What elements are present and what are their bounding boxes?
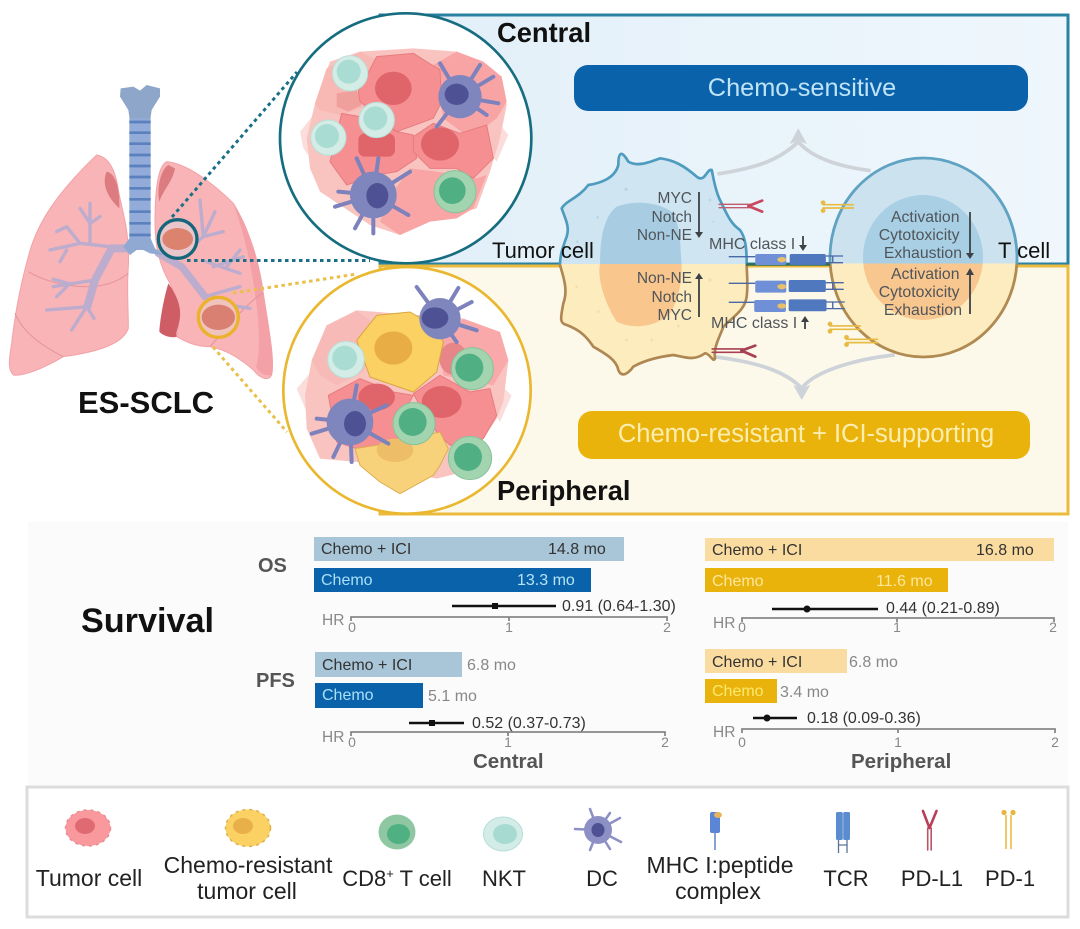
text: Chemo-resistant tumor cell: Chemo-resistant xyxy=(164,852,333,878)
chart: peripheral PFS: Chemo xyxy=(712,683,764,700)
text: MHC I:peptide complex: complex xyxy=(675,878,761,904)
text: DC: DC xyxy=(586,866,618,891)
T cell arrows xyxy=(966,212,974,314)
text: CD8+ T cell: + xyxy=(386,866,394,881)
peripheral zoom circle xyxy=(283,267,531,514)
icon: TCR xyxy=(836,812,850,853)
MHC class I labels: MHC class I xyxy=(709,236,795,253)
chart: peripheral OS: Chemo xyxy=(712,573,764,590)
panel: peripheral (chemo-resistant) xyxy=(380,266,1068,514)
CD8 T cell xyxy=(434,171,476,213)
icon: chemo-resistant tumor cell xyxy=(226,810,270,846)
panel: central (chemo-sensitive) xyxy=(380,15,1068,264)
heading: ES-SCLC: ES-SCLC xyxy=(78,385,214,420)
lung shading xyxy=(15,165,273,375)
chart: peripheral PFS: HR xyxy=(713,724,735,741)
banner: chemo-sensitive: Chemo-sensitive xyxy=(708,74,896,102)
tumor cell labels xyxy=(637,190,692,324)
tumor cell arrows xyxy=(695,192,703,317)
text: PD-L1: PD-L1 xyxy=(901,866,963,891)
chart: central OS: Chemo xyxy=(321,572,373,589)
chart: central PFS: Chemo + ICI xyxy=(322,657,412,674)
text: NKT: NKT xyxy=(482,866,526,891)
legend box xyxy=(27,787,1068,917)
arrow: down to chemo-resistant xyxy=(714,355,895,400)
trachea xyxy=(120,85,163,255)
heading: Central: Central xyxy=(497,17,591,48)
label: PFS: PFS xyxy=(256,670,295,692)
tumor cell labels: MYC xyxy=(658,190,692,207)
label: Central: Central xyxy=(473,750,544,773)
T cell labels: Cytotoxicity xyxy=(879,227,960,244)
T cell labels: Activation xyxy=(891,266,960,283)
chart: central PFS: 2 xyxy=(661,734,669,750)
chart: peripheral OS: HR xyxy=(713,615,735,632)
chart: central OS xyxy=(314,537,676,635)
T cell labels: Cytotoxicity xyxy=(879,284,960,301)
tumor cell xyxy=(560,154,747,374)
tumor cells xyxy=(330,53,493,185)
chart: central OS: 14.8 mo xyxy=(548,541,606,558)
chart: central PFS: Chemo xyxy=(322,687,374,704)
dotted connectors xyxy=(172,72,370,432)
chart: peripheral PFS: Chemo + ICI xyxy=(712,654,802,671)
banner: chemo-resistant + ICI-supporting: Chemo-resistant + ICI-supporting xyxy=(618,420,994,448)
label: Peripheral: Peripheral xyxy=(851,750,951,773)
chemo-resistant tumor cells xyxy=(355,312,448,494)
T cell labels: Exhaustion xyxy=(884,302,962,319)
chart: peripheral OS: 0.44 (0.21-0.89) xyxy=(886,600,1000,617)
icon: DC xyxy=(575,809,621,850)
tumor cells xyxy=(328,375,497,449)
chart: peripheral OS: Chemo + ICI xyxy=(712,542,802,559)
chart: central PFS: 0 xyxy=(348,734,356,750)
chart: central PFS: 1 xyxy=(504,734,512,750)
organelle dots xyxy=(575,188,714,341)
curved arrows and receptors xyxy=(714,128,895,400)
chart: peripheral OS: 16.8 mo xyxy=(976,542,1034,559)
text: Tumor cell: Tumor cell xyxy=(36,865,142,891)
peripheral tumor marker xyxy=(198,297,238,337)
chart: central PFS: 0.52 (0.37-0.73) xyxy=(472,715,586,732)
chart: central OS: Chemo + ICI xyxy=(321,541,411,558)
central zoom circle xyxy=(280,13,531,263)
chart: peripheral PFS: 0.18 (0.09-0.36) xyxy=(807,710,921,727)
T cell xyxy=(830,158,1017,357)
tumor cell labels: Notch xyxy=(652,289,692,306)
T cell labels xyxy=(879,209,962,319)
text: PD-1: PD-1 xyxy=(985,866,1035,891)
label: OS: OS xyxy=(258,555,287,577)
T cell labels: Exhaustion xyxy=(884,245,962,262)
tumor cell labels: Non-NE xyxy=(637,227,692,244)
icon: PD-1 xyxy=(1001,810,1016,849)
PD-1 receptors xyxy=(821,200,878,347)
pale tumor cells xyxy=(297,310,512,479)
dendritic cells xyxy=(312,287,477,462)
MHC class I labels: MHC class I xyxy=(711,315,797,332)
chart: central OS: 13.3 mo xyxy=(517,572,575,589)
chart: central OS: HR xyxy=(322,612,344,629)
MHC class I labels xyxy=(709,236,797,332)
chart: central PFS: 5.1 mo xyxy=(428,688,477,705)
chart: peripheral OS: 2 xyxy=(1049,619,1057,635)
banner: chemo-resistant + ICI-supporting xyxy=(578,411,1030,459)
chart: peripheral OS: 1 xyxy=(893,619,901,635)
chart: peripheral PFS: 3.4 mo xyxy=(780,684,829,701)
left lung xyxy=(9,155,129,375)
text: TCR: TCR xyxy=(823,866,869,891)
tumor cell labels: Notch xyxy=(652,209,692,226)
chart: peripheral PFS xyxy=(705,649,1059,750)
heading: Survival: Survival xyxy=(81,602,214,640)
chart: central PFS: HR xyxy=(322,729,344,746)
lungs illustration xyxy=(9,85,273,379)
chart: peripheral OS: 11.6 mo xyxy=(876,573,933,590)
central tumor marker xyxy=(158,220,197,258)
tumor cell labels: Non-NE xyxy=(637,270,692,287)
text: CD8+ T cell: CD8 xyxy=(342,866,386,891)
tumor cell labels: MYC xyxy=(658,307,692,324)
chart: peripheral PFS: 6.8 mo xyxy=(849,654,898,671)
tumor nuclei xyxy=(358,72,459,161)
chart: peripheral OS xyxy=(705,538,1057,635)
text: Chemo-resistant tumor cell: tumor cell xyxy=(197,878,297,904)
chart: peripheral PFS: 2 xyxy=(1051,734,1059,750)
text: CD8+ T cell: T cell xyxy=(394,866,452,891)
chart: central OS: 2 xyxy=(663,619,671,635)
chart: peripheral PFS: 1 xyxy=(894,734,902,750)
chart: central OS: 1 xyxy=(505,619,513,635)
heading: Peripheral: Peripheral xyxy=(497,475,631,506)
T cell labels: Activation xyxy=(891,209,960,226)
pale tumor cells xyxy=(300,48,508,235)
NKT cell xyxy=(328,341,364,378)
chart: peripheral PFS: 0 xyxy=(738,734,746,750)
icon: PD-L1 xyxy=(923,811,936,850)
chart: central PFS xyxy=(315,652,669,750)
CD8 T cells xyxy=(393,348,493,480)
label: T cell: T cell xyxy=(998,238,1050,263)
boundary line between cells xyxy=(746,263,830,266)
icon: MHC I peptide complex xyxy=(710,812,722,850)
MHC and TCR complexes xyxy=(729,254,845,312)
icon: CD8 T cell xyxy=(378,814,416,850)
chart: central OS: 0.91 (0.64-1.30) xyxy=(562,598,676,615)
chart: peripheral OS: 0 xyxy=(738,619,746,635)
dendritic cells xyxy=(335,63,498,233)
bronchi xyxy=(47,200,250,330)
chart: central OS: 0 xyxy=(348,619,356,635)
text: MHC I:peptide complex: MHC I:peptide xyxy=(646,852,794,878)
tumor nuclei xyxy=(358,343,467,418)
panel: survival xyxy=(28,522,1068,785)
PD-L1 receptors xyxy=(712,201,762,357)
label: Tumor cell: Tumor cell xyxy=(492,238,594,263)
receptors xyxy=(712,200,878,357)
icon: NKT xyxy=(484,817,522,851)
banner: chemo-sensitive xyxy=(574,65,1028,111)
NKT cells xyxy=(311,56,394,155)
icon: tumor cell xyxy=(66,810,110,846)
right lung xyxy=(155,162,273,379)
MHC arrows xyxy=(799,236,809,329)
chart: central PFS: 6.8 mo xyxy=(467,657,516,674)
arrow: up to chemo-sensitive xyxy=(717,128,871,174)
